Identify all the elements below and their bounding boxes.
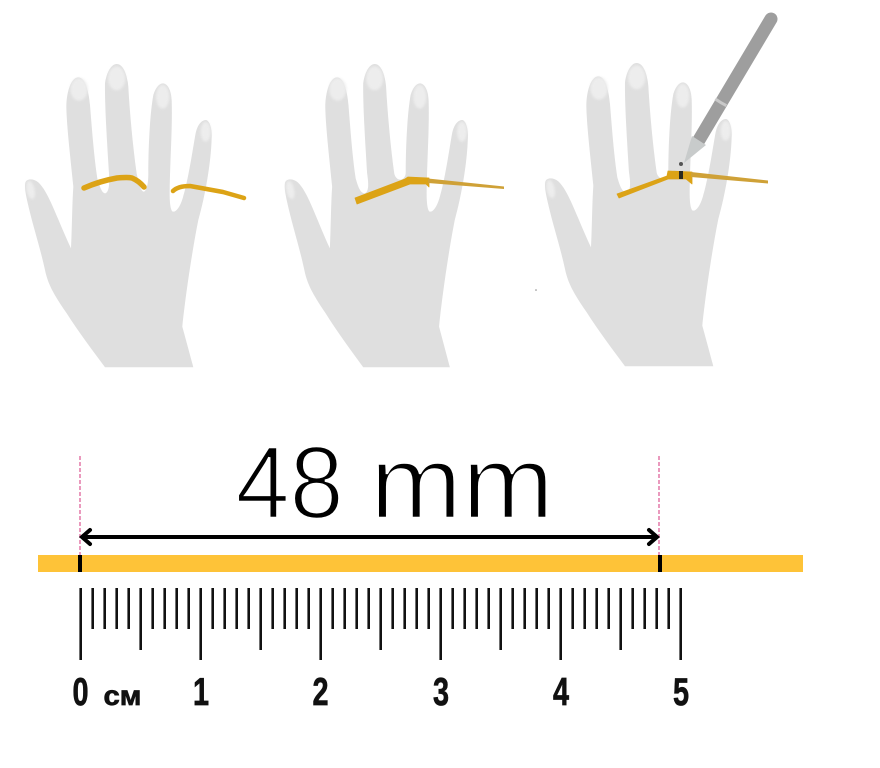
band overlapped thick part: [355, 177, 429, 204]
band right segment: [173, 186, 244, 198]
hand 1: band wrapped around finger: [25, 64, 244, 367]
pen mark on band: [679, 171, 683, 179]
ruler ticks: [81, 588, 681, 660]
yellow band strip: [38, 555, 803, 572]
band thin tail: [428, 178, 504, 189]
ruler labels: 5: [673, 671, 689, 714]
ruler labels: 0: [72, 671, 89, 714]
left pink guide line: [79, 456, 81, 556]
band overlapped thick part: [617, 171, 692, 198]
ruler labels: 3: [433, 671, 449, 714]
right pink guide line: [658, 456, 660, 556]
band thin tail: [691, 172, 768, 184]
measurement label: 48: [236, 425, 344, 540]
ruler labels: 1: [193, 671, 209, 714]
ruler labels: 2: [312, 671, 329, 714]
ruler labels: [72, 671, 689, 714]
ruler labels: 4: [553, 671, 569, 714]
unit label: см: [104, 680, 142, 711]
stray dot: [535, 289, 537, 291]
hand 2: band overlapped: [285, 64, 504, 367]
hand 3: marking the band with a pencil: [545, 19, 771, 366]
icon: pencil: [679, 19, 771, 166]
band left segment: [84, 178, 144, 188]
double arrow: [82, 530, 657, 544]
measurement label: mm: [370, 425, 554, 540]
